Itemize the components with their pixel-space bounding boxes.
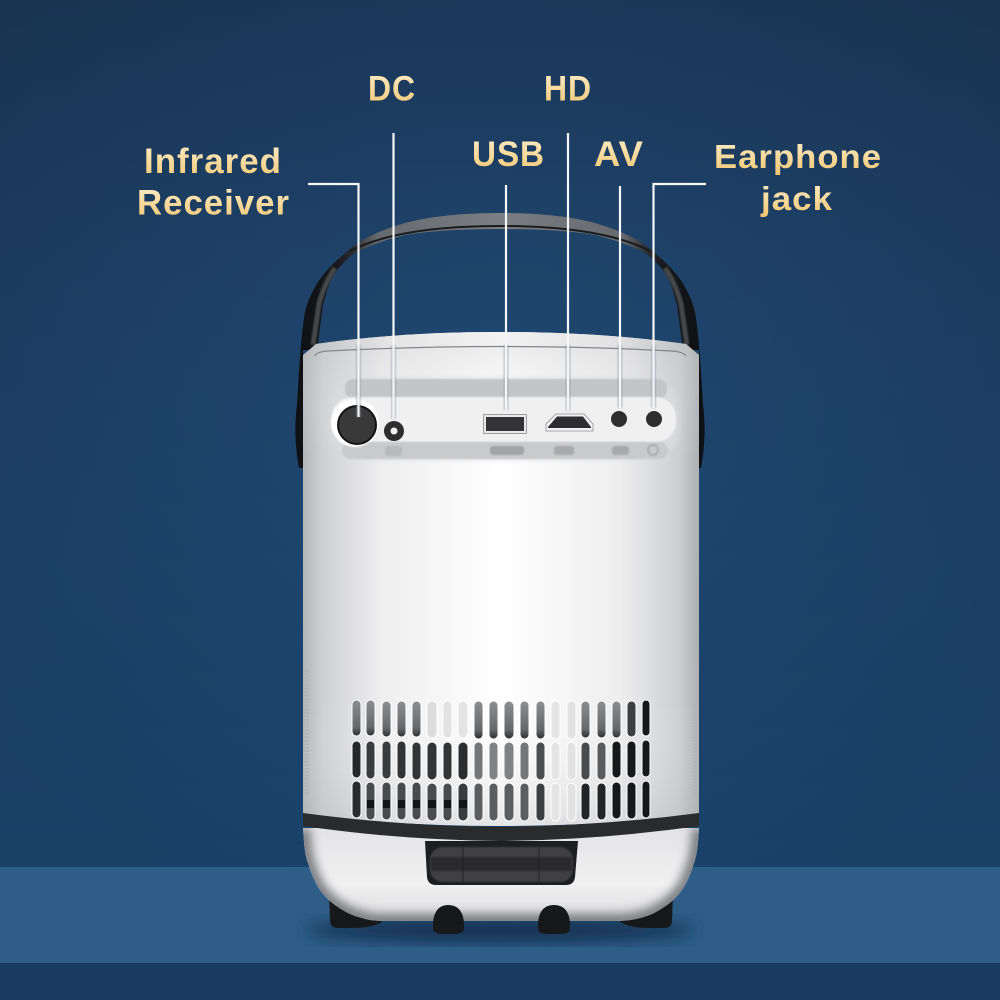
AV port xyxy=(611,411,627,427)
callout lines xyxy=(308,133,706,419)
lid rim xyxy=(312,332,690,352)
port panel xyxy=(330,379,678,459)
label: Infrared Receiver: Receiver xyxy=(137,184,290,222)
floor front edge xyxy=(0,963,1000,1000)
handle xyxy=(295,213,705,468)
label: Infrared Receiver xyxy=(137,142,290,222)
USB port xyxy=(484,414,526,434)
outer feet xyxy=(329,895,673,928)
port engravings xyxy=(385,445,658,456)
label: Earphone jack xyxy=(714,138,882,217)
infrared glow xyxy=(331,399,379,447)
middle feet xyxy=(433,905,570,934)
projector xyxy=(295,213,705,934)
floor xyxy=(0,867,1000,964)
earphone port xyxy=(646,411,662,427)
label: Infrared Receiver: Infrared xyxy=(144,142,282,181)
lens cover xyxy=(425,841,578,885)
DC port xyxy=(384,421,404,441)
lower base xyxy=(303,828,699,921)
dark reflection in third vent row xyxy=(367,800,467,808)
vent slots xyxy=(352,700,650,821)
main body xyxy=(303,332,699,826)
side speaker dots xyxy=(306,670,696,795)
label: HD: HD xyxy=(544,70,592,108)
label: AV: AV xyxy=(594,135,644,174)
projector shadow xyxy=(305,916,695,944)
label: USB: USB xyxy=(472,135,545,174)
label: Earphone jack: Earphone xyxy=(714,138,882,175)
black band xyxy=(303,813,699,841)
label: Earphone jack: jack xyxy=(760,180,833,217)
label: DC: DC xyxy=(368,70,416,108)
infrared receiver xyxy=(338,406,376,444)
callout line shadows on body xyxy=(358,345,654,419)
HD port xyxy=(546,414,593,431)
